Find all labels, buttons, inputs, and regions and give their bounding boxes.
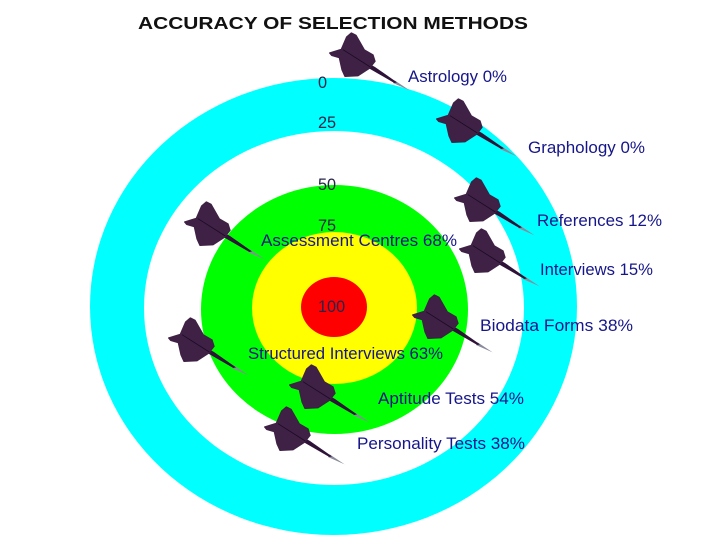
label: interviews: Interviews 15% <box>540 260 653 279</box>
label: assessment centres: Assessment Centres 68% <box>261 231 457 250</box>
dart: aptitude tests <box>290 365 370 422</box>
bullseye: red <box>301 277 367 337</box>
dart: biodata forms <box>413 295 493 352</box>
scale numbers: 100 <box>318 298 345 316</box>
scale numbers: 0 <box>318 74 327 92</box>
label: astrology: Astrology 0% <box>408 67 507 86</box>
ring: yellow <box>252 232 417 384</box>
label: personality tests: Personality Tests 38% <box>357 434 525 453</box>
dart: references <box>455 178 535 235</box>
dart: assessment centres <box>185 202 265 259</box>
dart: graphology <box>437 99 517 156</box>
label: structured interviews: Structured Interviews 63% <box>248 344 443 363</box>
ring: white <box>144 131 524 485</box>
title: ACCURACY OF SELECTION METHODS <box>138 13 528 33</box>
scale numbers: 75 <box>318 217 336 235</box>
label: references: References 12% <box>537 211 662 230</box>
label: graphology: Graphology 0% <box>528 138 645 157</box>
ring: green <box>201 185 468 434</box>
dart: interviews <box>460 229 540 286</box>
scale numbers: 25 <box>318 114 336 132</box>
label: biodata forms: Biodata Forms 38% <box>480 316 633 335</box>
dart: astrology <box>330 33 410 90</box>
label: aptitude tests: Aptitude Tests 54% <box>378 389 524 408</box>
scale numbers <box>318 74 345 316</box>
target board <box>90 78 577 535</box>
scale numbers: 50 <box>318 176 336 194</box>
dart: personality tests <box>265 407 345 464</box>
ring: outer cyan <box>90 78 577 535</box>
dart: structured interviews <box>169 318 249 375</box>
